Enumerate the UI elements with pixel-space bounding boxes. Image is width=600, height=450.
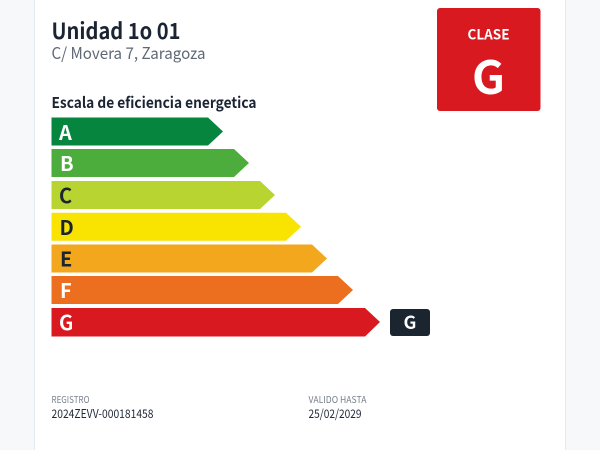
bar B: B [60, 148, 74, 177]
validity block: VALIDO HASTA [308, 392, 367, 406]
registration block: REGISTRO [52, 392, 90, 406]
registration block [52, 392, 154, 422]
bar C: C [59, 180, 72, 209]
bar D [52, 212, 301, 241]
bar B [52, 148, 249, 177]
validity block: 25/02/2029 [308, 405, 362, 422]
bar C [52, 180, 275, 209]
class badge [437, 8, 540, 111]
bar D: D [60, 212, 74, 241]
bar A: A [58, 117, 72, 146]
current rating marker [390, 309, 430, 336]
scale heading: Escala de eficiencia energetica [52, 92, 256, 113]
class badge letter: G [472, 42, 505, 108]
efficiency scale chart [52, 117, 380, 336]
bar G [52, 307, 380, 336]
registration block: 2024ZEVV-000181458 [52, 405, 154, 422]
title: Unidad 1o 01 [52, 14, 180, 46]
bar E: E [60, 244, 72, 272]
bar G: G [59, 307, 73, 336]
validity block [308, 392, 367, 422]
bar A [52, 117, 223, 146]
current rating marker: G [404, 309, 416, 335]
class badge label: CLASE [468, 24, 510, 44]
bar F [52, 275, 353, 304]
bar E [52, 244, 327, 272]
bar F: F [60, 275, 72, 304]
address: C/ Movera 7, Zaragoza [52, 40, 206, 64]
